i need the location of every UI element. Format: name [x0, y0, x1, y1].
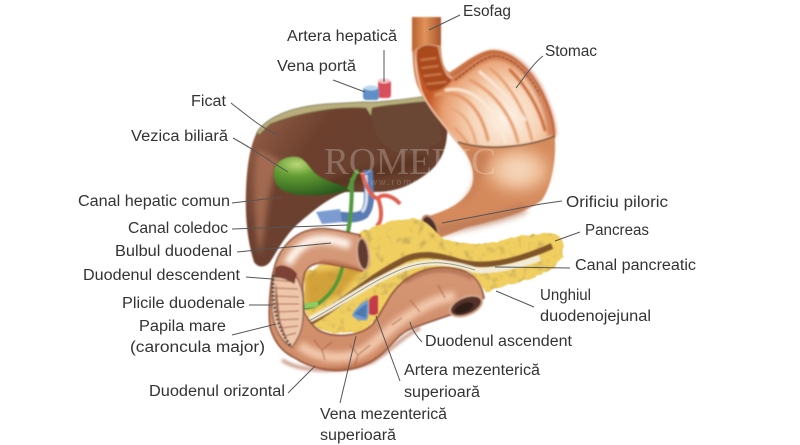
label: Canal pancreatic: Canal pancreatic: [575, 257, 696, 274]
label: Vena mezenterica superioara: superioară: [320, 427, 396, 444]
label: Canal coledoc: Canal coledoc: [128, 220, 228, 237]
stomach lining: [416, 45, 552, 146]
watermark: www.romedic.ro: [361, 177, 452, 187]
label: Stomac: Stomac: [545, 43, 597, 60]
watermark: ROMEDIC: [324, 141, 496, 183]
label: Artera hepatica: Artera hepatică: [287, 28, 397, 45]
label: Vezica biliara: Vezica biliară: [131, 128, 228, 145]
label: Pancreas: Pancreas: [585, 222, 649, 239]
label: Duodenul ascendent: Duodenul ascendent: [425, 333, 573, 350]
head shadow: [305, 262, 370, 310]
label: Plicile duodenale: Plicile duodenale: [122, 295, 245, 312]
duodenal folds opening: [272, 266, 303, 347]
lining folds: [421, 58, 545, 143]
label: Unghiul duodenojejunal: Unghiul: [540, 287, 591, 304]
falciform band: [257, 96, 431, 135]
label: Ficat: Ficat: [191, 93, 227, 110]
label: Unghiul duodenojejunal: duodenojejunal: [540, 308, 651, 325]
label: Papila mare: Papila mare: [139, 318, 226, 335]
duodenum: [269, 229, 485, 370]
label: Esofag: Esofag: [463, 3, 511, 20]
label: Artera mezenterica superioara: superioară: [404, 384, 480, 401]
label: Artera mezenterica superioara: Artera mezenterică: [404, 362, 540, 379]
duodenum openings: [355, 237, 371, 271]
label: Bulbul duodenal: Bulbul duodenal: [115, 243, 232, 260]
pylorus tube: [436, 208, 525, 232]
leader lines: [231, 15, 580, 403]
stomach: [412, 17, 555, 243]
label: Canal hepatic comun: Canal hepatic comun: [78, 193, 230, 210]
mesenteric vessels: [352, 295, 378, 320]
pancreatic duct: [305, 246, 552, 325]
duodenum highlights: [288, 239, 350, 264]
label: Orificiu piloric: Orificiu piloric: [566, 194, 668, 211]
label: Duodenul orizontal: Duodenul orizontal: [149, 383, 285, 400]
pancreas: [303, 219, 563, 334]
portal vein: [320, 170, 369, 217]
label: Duodenul descendent: Duodenul descendent: [83, 267, 241, 284]
liver: [246, 96, 447, 266]
portal vein and hepatic artery stubs: [363, 78, 391, 100]
mesenteric branch vessels: [314, 285, 445, 365]
gallbladder and bile ducts: [274, 157, 400, 236]
esophagus: [412, 17, 441, 52]
lining rim: [452, 55, 552, 136]
labels: [78, 3, 696, 444]
label: Vena porta: Vena portă: [277, 58, 356, 75]
hepatic artery: [362, 172, 400, 226]
label: caroncula major: (caroncula major): [130, 339, 265, 356]
label: Vena mezenterica superioara: Vena mezenterică: [320, 406, 447, 423]
common bile duct: [303, 236, 346, 308]
stomach antrum highlight: [484, 146, 552, 194]
